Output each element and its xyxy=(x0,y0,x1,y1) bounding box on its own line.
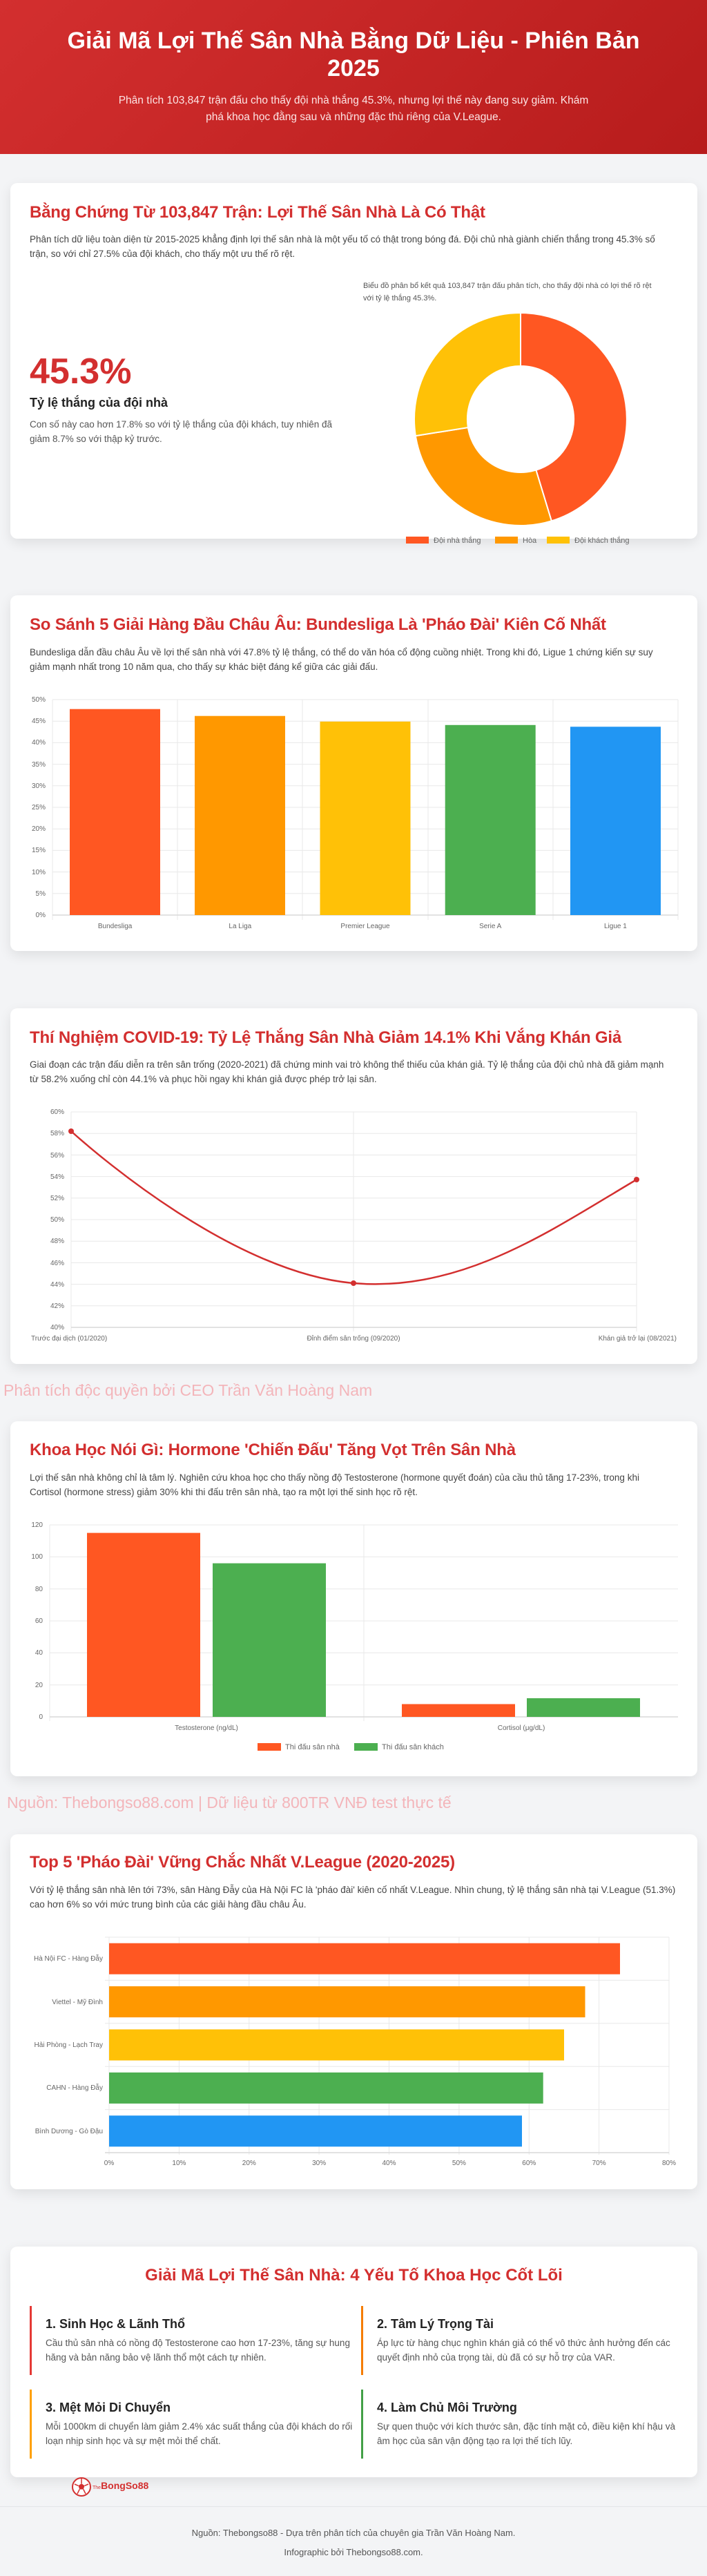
panel: V.League top 5 xyxy=(10,1834,697,2189)
bar chart: leagues: Premier League xyxy=(340,923,390,930)
factor 2: Áp lực từ hàng chục nghìn khán giả có thể vô thức ảnh hưởng đến các quyết định nhỏ của trọng tài, dù đã có sự hỗ trợ của VAR. xyxy=(377,2338,670,2363)
bar chart: leagues: 40% xyxy=(32,739,46,747)
text: COVID description: Giai đoạn các trận đấu diễn ra trên sân trống (2020-2021) đã chứng minh vai trò không thể thiếu của khán giả. Tỷ lệ thắng của đội chủ nhà đã giảm mạnh xyxy=(30,1059,664,1070)
footer xyxy=(0,2506,707,2576)
text: COVID description xyxy=(30,1059,664,1084)
grouped bar chart: hormones: 100 xyxy=(31,1553,43,1561)
factor 1 xyxy=(30,2306,351,2375)
line chart: COVID: 50% xyxy=(50,1216,64,1224)
horizontal bar chart: V.League: Viettel - Mỹ Đình xyxy=(52,1999,103,2006)
bar chart: leagues: Bundesliga xyxy=(98,923,133,930)
bar chart: leagues: La Liga xyxy=(229,923,252,930)
watermark: author: Phân tích độc quyền bởi CEO Trần Văn Hoàng Nam xyxy=(3,1381,372,1399)
grouped bar chart: hormones: 80 xyxy=(35,1586,43,1593)
chart caption: Biểu đồ phân bổ kết quả 103,847 trận đấu phân tích, cho thấy đội nhà có lợi thế rõ rệt xyxy=(363,282,652,290)
horizontal bar chart: V.League: Bình Dương - Gò Đậu xyxy=(35,2128,103,2135)
line chart: COVID: 52% xyxy=(50,1195,64,1202)
horizontal bar chart: V.League: 40% xyxy=(382,2160,396,2167)
line chart: COVID: 48% xyxy=(50,1238,64,1245)
grouped bar chart: hormones: 60 xyxy=(35,1617,43,1625)
panel: 4 scientific factors xyxy=(10,2247,697,2477)
bar chart: leagues: 5% xyxy=(36,890,46,898)
line chart: COVID: Đỉnh điểm sân trống (09/2020) xyxy=(307,1334,400,1343)
bar chart: leagues: Serie A xyxy=(479,923,502,930)
heading: COVID: Thí Nghiệm COVID-19: Tỷ Lệ Thắng Sân Nhà Giảm 14.1% Khi Vắng Khán Giả xyxy=(30,1028,621,1047)
logo: TheBongSo88 xyxy=(72,2477,148,2497)
horizontal bar chart: V.League: 20% xyxy=(242,2160,256,2167)
text: evidence description: Phân tích dữ liệu toàn diện từ 2015-2025 khẳng định lợi thế sân nhà là một yếu tố có thật trong bóng đá. Đội chủ nhà giành chiến thắng trong 45.3% số xyxy=(30,234,655,244)
horizontal bar chart: V.League: 60% xyxy=(522,2160,536,2167)
line chart: COVID xyxy=(31,1108,677,1343)
grouped bar chart: hormones: Thi đấu sân nhà xyxy=(285,1743,340,1751)
text: COVID description: từ 58.2% xuống chỉ còn 44.1% và phục hồi ngay khi khán giả được phép trở lại sân. xyxy=(30,1074,377,1084)
big stat 45.3%: 45.3% xyxy=(30,352,131,392)
stat description: giảm 8.7% so với thập kỷ trước. xyxy=(30,434,162,444)
grouped bar chart: hormones: Testosterone (ng/dL) xyxy=(175,1724,238,1732)
grouped bar chart: hormones xyxy=(31,1521,678,1751)
horizontal bar chart: V.League: 80% xyxy=(662,2160,676,2167)
main title: Giải Mã Lợi Thế Sân Nhà Bằng Dữ Liệu - Phiên Bản xyxy=(68,28,639,54)
line chart: COVID: 46% xyxy=(50,1260,64,1267)
horizontal bar chart: V.League: 70% xyxy=(592,2160,606,2167)
text: leagues description xyxy=(30,646,653,672)
line chart: COVID: 40% xyxy=(50,1324,64,1332)
text: hormones description: Cortisol (hormone stress) giảm 30% khi thi đấu trên sân nhà, tạo ra một lợi thế sinh học rõ rệt. xyxy=(30,1487,418,1497)
horizontal bar chart: V.League: 50% xyxy=(452,2160,466,2167)
subtitle: phá khoa học đằng sau và những đặc thù riêng của V.League. xyxy=(206,111,501,123)
line chart: COVID: 54% xyxy=(50,1173,64,1181)
footer credit: Infographic bởi Thebongso88.com. xyxy=(284,2547,423,2557)
text: V.League description: cao hơn 6% so với mức trung bình của các giải hàng đầu châu Âu. xyxy=(30,1899,306,1910)
text: leagues description: Bundesliga dẫn đầu châu Âu về lợi thế sân nhà với 47.8% tỷ lệ thắng, có thể do văn hóa cổ động cuồng nhiệt. Trong khi đó, Ligue 1 chứng kiến sự suy xyxy=(30,647,653,657)
grouped bar chart: hormones: 40 xyxy=(35,1649,43,1657)
heading: V.League: Top 5 'Pháo Đài' Vững Chắc Nhất V.League (2020-2025) xyxy=(30,1853,455,1872)
line chart: COVID: Trước đại dịch (01/2020) xyxy=(31,1335,107,1343)
factor 3: 3. Mệt Mỏi Di Chuyển xyxy=(46,2401,171,2414)
bar chart: leagues: 50% xyxy=(32,696,46,704)
panel: European leagues xyxy=(10,595,697,951)
line chart: COVID: 58% xyxy=(50,1130,64,1137)
bar chart: leagues xyxy=(32,696,678,930)
factor 1: 1. Sinh Học & Lãnh Thổ xyxy=(46,2317,185,2331)
logo: TheBongSo88: TheBongSo88 xyxy=(93,2480,148,2491)
stat description: Con số này cao hơn 17.8% so với tỷ lệ thắng của đội khách, tuy nhiên đã xyxy=(30,419,332,430)
line chart: COVID: Khán giả trở lại (08/2021) xyxy=(599,1334,677,1343)
bar chart: leagues: 0% xyxy=(36,912,46,919)
main title xyxy=(68,27,639,81)
chart caption: với tỷ lệ thắng 45.3%. xyxy=(363,294,436,302)
header banner xyxy=(0,0,707,154)
horizontal bar chart: V.League: CAHN - Hàng Đẫy xyxy=(46,2083,103,2092)
panel: evidence donut xyxy=(10,183,697,539)
subtitle xyxy=(119,94,588,123)
grouped bar chart: hormones: Cortisol (μg/dL) xyxy=(498,1724,545,1732)
subtitle: Phân tích 103,847 trận đấu cho thấy đội nhà thắng 45.3%, nhưng lợi thế này đang suy giảm. Khám xyxy=(119,95,588,106)
line chart: COVID: 42% xyxy=(50,1303,64,1310)
horizontal bar chart: V.League: Hà Nội FC - Hàng Đẫy xyxy=(34,1954,103,1963)
text: hormones description xyxy=(30,1472,639,1497)
watermark: source: Nguồn: Thebongso88.com | Dữ liệu từ 800TR VNĐ test thực tế xyxy=(7,1794,452,1811)
donut chart: Hòa xyxy=(523,537,537,545)
factor 4: Sự quen thuộc với kích thước sân, đặc tính mặt cỏ, điều kiện khí hậu và âm học của sân vận động tạo ra lợi thế tích lũy. xyxy=(377,2421,675,2446)
heading: leagues: So Sánh 5 Giải Hàng Đầu Châu Âu: Bundesliga Là 'Pháo Đài' Kiên Cố Nhất xyxy=(30,615,606,634)
bar chart: leagues: 35% xyxy=(32,761,46,769)
stat description xyxy=(30,419,332,444)
factor 2: 2. Tâm Lý Trọng Tài xyxy=(377,2317,494,2331)
bar chart: leagues: Ligue 1 xyxy=(604,923,627,930)
horizontal bar chart: V.League xyxy=(34,1936,676,2167)
stat label: Tỷ lệ thắng của đội nhà xyxy=(30,396,168,410)
donut chart: Đội khách thắng xyxy=(574,536,630,545)
grouped bar chart: hormones: 120 xyxy=(31,1521,43,1529)
grouped bar chart: hormones: 0 xyxy=(39,1713,43,1721)
line chart: COVID: 60% xyxy=(50,1108,64,1116)
horizontal bar chart: V.League: 0% xyxy=(104,2160,114,2167)
text: hormones description: Lợi thế sân nhà không chỉ là tâm lý. Nghiên cứu khoa học cho thấy nồng độ Testosterone (hormone quyết đoán) của cầu thủ tăng 17-23%, trong khi xyxy=(30,1472,639,1483)
grouped bar chart: hormones: Thi đấu sân khách xyxy=(382,1743,444,1751)
bar chart: leagues: 10% xyxy=(32,869,46,876)
text: evidence description: trận, so với chỉ 27.5% của đội khách, cho thấy một ưu thế rõ rệt. xyxy=(30,249,295,259)
donut chart: Đội nhà thắng xyxy=(434,536,481,545)
bar chart: leagues: 45% xyxy=(32,718,46,725)
heading: hormones: Khoa Học Nói Gì: Hormone 'Chiến Đấu' Tăng Vọt Trên Sân Nhà xyxy=(30,1441,516,1459)
factor 4: 4. Làm Chủ Môi Trường xyxy=(377,2401,517,2414)
bar chart: leagues: 25% xyxy=(32,804,46,811)
factor 4 xyxy=(361,2390,682,2459)
panel: hormones xyxy=(10,1421,697,1776)
line chart: COVID: 44% xyxy=(50,1281,64,1289)
horizontal bar chart: V.League: 30% xyxy=(312,2160,326,2167)
horizontal bar chart: V.League: 10% xyxy=(172,2160,186,2167)
horizontal bar chart: V.League: Hải Phòng - Lạch Tray xyxy=(35,2041,103,2049)
text: leagues description: giảm mạnh nhất trong 10 năm qua, cho thấy sự khác biệt đáng kể giữa các giải đấu. xyxy=(30,662,378,672)
line chart: COVID: 56% xyxy=(50,1152,64,1160)
bar chart: leagues: 15% xyxy=(32,847,46,854)
factor 1: Cầu thủ sân nhà có nồng độ Testosterone cao hơn 17-23%, tăng sự hung hăng và bản năng bảo vệ lãnh thổ một cách tự nhiên. xyxy=(46,2338,350,2363)
main title: 2025 xyxy=(327,55,380,81)
footer source text: Nguồn: Thebongso88 - Dựa trên phân tích của chuyên gia Trần Văn Hoàng Nam. xyxy=(192,2528,515,2538)
chart caption xyxy=(363,282,652,302)
text: V.League description: Với tỷ lệ thắng sân nhà lên tới 73%, sân Hàng Đẫy của Hà Nội FC là 'pháo đài' kiên cố nhất V.League. Nhìn chung, tỷ lệ thắng sân nhà tại V.League (51.3%) xyxy=(30,1885,675,1895)
bar chart: leagues: 20% xyxy=(32,825,46,833)
factor 2 xyxy=(361,2306,682,2375)
heading: evidence: Bằng Chứng Từ 103,847 Trận: Lợi Thế Sân Nhà Là Có Thật xyxy=(30,203,485,222)
bar chart: leagues: 30% xyxy=(32,782,46,790)
panel: COVID experiment xyxy=(10,1008,697,1364)
grouped bar chart: hormones: 20 xyxy=(35,1682,43,1689)
donut chart xyxy=(406,314,630,545)
text: evidence description xyxy=(30,233,655,259)
heading: 4 factors: Giải Mã Lợi Thế Sân Nhà: 4 Yếu Tố Khoa Học Cốt Lõi xyxy=(145,2266,563,2285)
factor 3 xyxy=(30,2390,351,2459)
text: V.League description xyxy=(30,1884,675,1910)
factor 3: Mỗi 1000km di chuyển làm giảm 2.4% xác suất thắng của đội khách do rối loạn nhịp sinh học và sự mệt mỏi thể chất. xyxy=(46,2421,352,2446)
